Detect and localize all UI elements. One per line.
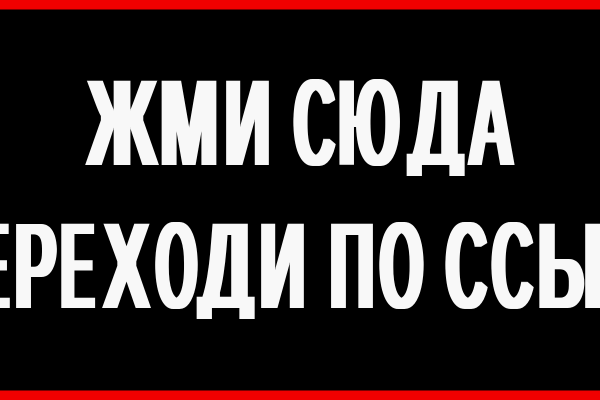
heading: line 2: О [380, 195, 423, 338]
heading: line 1: Ю [338, 52, 400, 195]
heading: line 2: Р [15, 195, 56, 338]
heading: line 2: Е [61, 195, 94, 338]
heading: line 2 [0, 222, 600, 319]
bottom red band [0, 390, 600, 400]
heading: line 1: М [160, 52, 218, 195]
heading: line 1: С [294, 52, 335, 195]
heading: line 2: С [446, 195, 487, 338]
heading: line 2: О [156, 195, 197, 338]
top red band [0, 0, 600, 10]
heading: line 1: Ж [86, 52, 158, 195]
heading: line 2: И [260, 195, 305, 338]
heading: line 2: П [330, 195, 374, 338]
heading: line 1 [85, 79, 515, 176]
heading: line 2: Х [103, 195, 150, 338]
banner: А [468, 52, 514, 195]
heading: line 2: Д [199, 195, 253, 338]
heading: line 1: Д [409, 52, 463, 195]
heading: line 2: С [492, 195, 533, 338]
heading: line 1: И [225, 52, 270, 195]
